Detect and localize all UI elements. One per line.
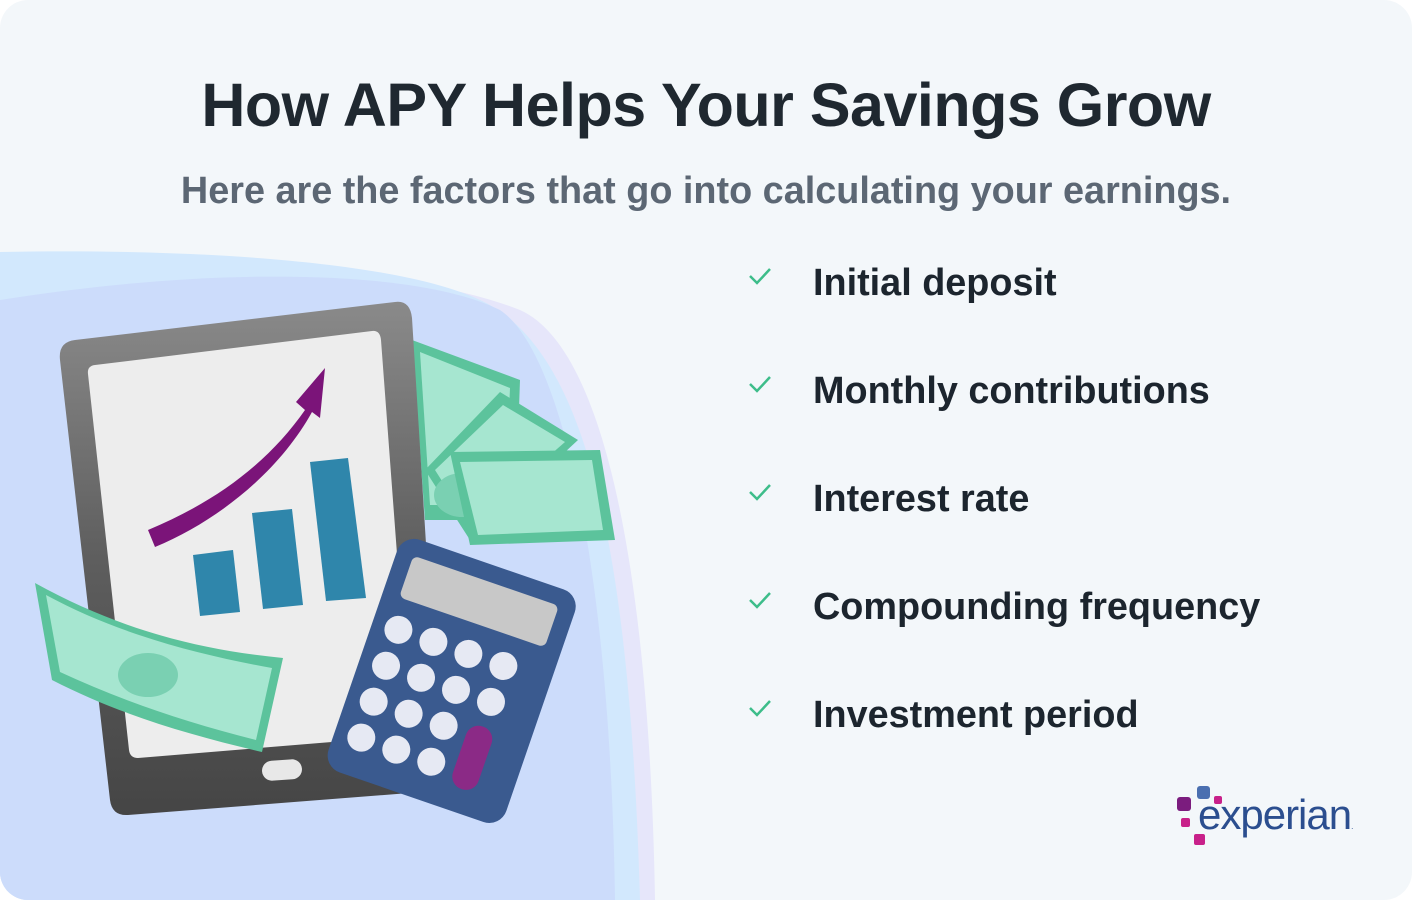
item: investment period: Investment period [813, 694, 1139, 736]
money bottom left [35, 583, 283, 752]
money fan top right [412, 340, 615, 545]
illustration: tablet, money, calculator [35, 302, 615, 823]
logo: experian: experian. [1198, 791, 1352, 838]
bars [193, 550, 240, 616]
arrow [148, 368, 325, 547]
logo: experian [1177, 786, 1353, 845]
item: initial deposit: Initial deposit [813, 262, 1057, 304]
item: monthly contributions: Monthly contributions [813, 370, 1210, 412]
checklist of factors [749, 262, 1260, 736]
tablet [60, 302, 440, 815]
item: interest rate: Interest rate [813, 478, 1029, 520]
subtitle: Here are the factors that go into calculating your earnings. [181, 170, 1231, 212]
title: How APY Helps Your Savings Grow [201, 71, 1211, 139]
item: compounding frequency: Compounding frequency [813, 586, 1260, 628]
calculator [323, 534, 581, 828]
